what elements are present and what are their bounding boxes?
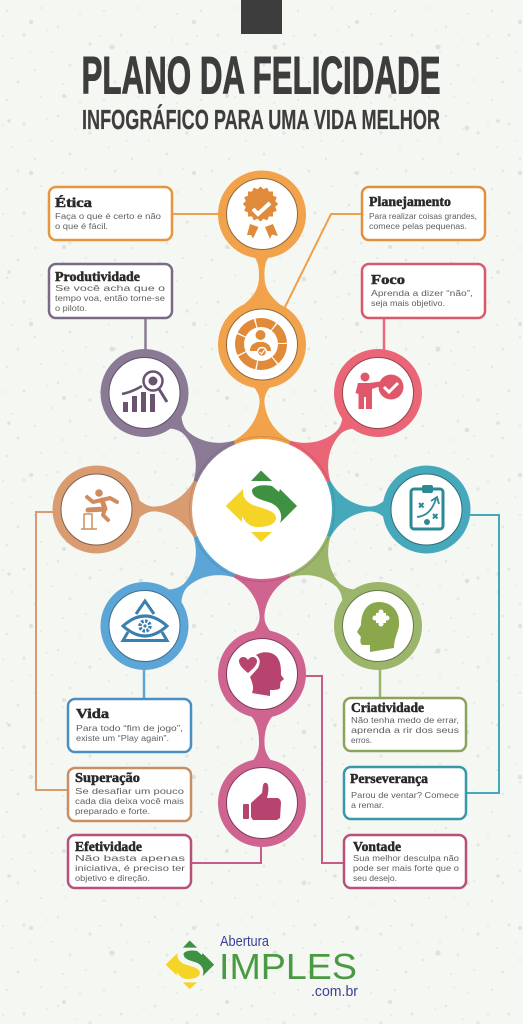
circle: produtividade	[100, 349, 188, 437]
panel: vontade	[344, 835, 466, 888]
text: ética: Faça o que é certo e não	[55, 211, 161, 221]
icon: tactics clipboard	[411, 485, 443, 529]
text: criatividade: Não tenha medo de errar,	[351, 715, 459, 725]
text: ética: o que é fácil.	[55, 221, 108, 231]
text: efetividade	[75, 853, 185, 883]
icon: hurdle jumper	[81, 489, 117, 529]
icon: head with heart	[239, 652, 284, 696]
icon: chart and magnifier	[122, 372, 167, 412]
text: vontade: seu desejo.	[353, 873, 397, 883]
centre hub with logo	[192, 439, 332, 579]
circle: vontade	[218, 630, 306, 718]
panel: perseverança	[344, 767, 466, 819]
panel: efetividade	[68, 835, 191, 888]
panel: vida	[68, 699, 191, 752]
heading: superação: Superação	[75, 771, 140, 786]
heading: foco: Foco	[371, 273, 405, 288]
text: produtividade	[55, 283, 165, 313]
text: foco: seja mais objetivo.	[371, 298, 445, 308]
heading: criatividade: Criatividade	[351, 701, 424, 716]
text: criatividade: erros.	[351, 735, 372, 745]
text: efetividade: objetivo e direção.	[75, 873, 150, 883]
heading: vontade: Vontade	[353, 840, 401, 855]
text: superação: Se desafiar um pouco	[75, 786, 184, 796]
icon: thumbs up	[243, 783, 281, 820]
heading: produtividade: Produtividade	[55, 270, 140, 285]
top tab	[241, 0, 282, 34]
text: perseverança: a remar.	[351, 800, 384, 810]
panel: superação	[68, 768, 191, 821]
heading: efetividade: Efetividade	[75, 840, 142, 855]
necks between stacked circles	[240, 252, 284, 764]
icon: centre logo	[226, 470, 297, 542]
connector lines	[36, 214, 499, 863]
icon: head with puzzle	[357, 602, 399, 652]
text: vontade: pode ser mais forte que o	[353, 863, 459, 873]
text: planejamento: Para realizar coisas grandes,	[369, 211, 477, 221]
text: produtividade: tempo voa, então torne-se	[55, 293, 165, 303]
icon: target person	[240, 322, 282, 366]
text: planejamento: comece pelas pequenas.	[369, 221, 467, 231]
heading: perseverança: Perseverança	[350, 772, 428, 787]
text: ética	[55, 211, 161, 231]
text: foco	[371, 288, 473, 308]
logo text: imples: IMPLES	[219, 946, 357, 987]
circle: superação	[52, 466, 140, 554]
logo text: abertura: Abertura	[220, 933, 270, 950]
icon: all-seeing eye	[123, 601, 167, 640]
text: produtividade: Se você acha que o	[55, 283, 165, 293]
circle: perseverança	[382, 466, 470, 554]
petals around centre hub	[139, 386, 385, 632]
circle: planejamento	[218, 300, 306, 388]
text: perseverança: Parou de ventar? Comece	[351, 790, 459, 800]
panel: criatividade	[344, 698, 466, 751]
logo text: domain: .com.br	[311, 983, 358, 1000]
circle: criatividade	[334, 582, 422, 670]
text: superação: preparado e forte.	[75, 806, 150, 816]
text: vontade: Sua melhor desculpa não	[353, 853, 459, 863]
text: criatividade	[351, 715, 459, 745]
text: foco: Aprenda a dizer “não”,	[371, 288, 473, 298]
text: vontade	[353, 853, 459, 883]
panel: produtividade	[49, 264, 172, 318]
circle: ética	[218, 170, 306, 258]
text: vida: existe um “Play again”.	[76, 733, 169, 743]
panel: planejamento	[362, 187, 485, 240]
text: superação: cada dia deixa você mais	[75, 796, 184, 806]
heading: ética: Ética	[55, 194, 92, 211]
text: efetividade: Não basta apenas	[75, 853, 185, 863]
panel: foco	[362, 264, 485, 318]
circle: foco	[334, 349, 422, 437]
text: vida	[76, 723, 183, 743]
text: criatividade: aprenda a rir dos seus	[351, 725, 459, 735]
circle: vida	[100, 582, 188, 670]
icon: award badge	[243, 186, 278, 239]
icon: person with check	[356, 372, 404, 409]
text: perseverança	[351, 790, 459, 810]
heading: vida: Vida	[76, 707, 109, 722]
panel: ética	[49, 187, 172, 240]
heading: planejamento: Planejamento	[369, 195, 451, 210]
text: superação	[75, 786, 184, 816]
text: vida: Para todo “fim de jogo”,	[76, 723, 183, 733]
icon: footer logo mark	[166, 941, 214, 989]
text: produtividade: o piloto.	[55, 303, 87, 313]
circle: efetividade	[218, 759, 306, 847]
text: efetividade: iniciativa, é preciso ter	[75, 863, 185, 873]
text: planejamento	[369, 211, 477, 231]
footer logo	[166, 933, 358, 1000]
